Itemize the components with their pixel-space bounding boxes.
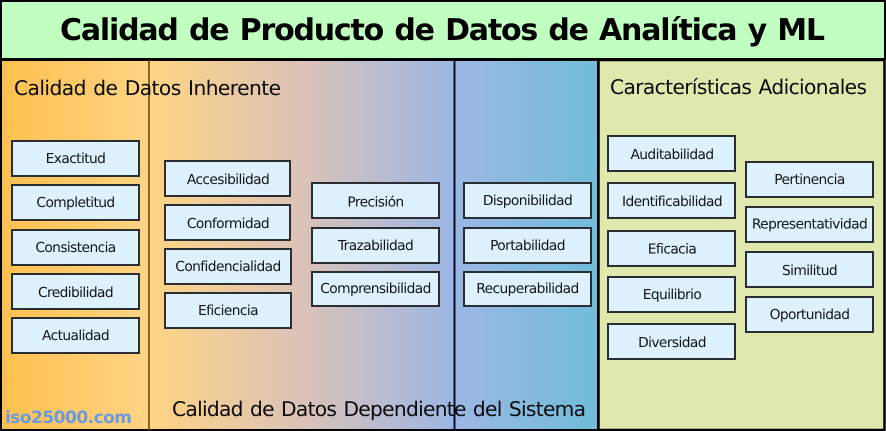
column 4: system dependent: [464, 183, 591, 306]
column 6: additional: Similitud: [782, 263, 837, 279]
column 3: inherent and system: Comprensibilidad: [320, 281, 431, 297]
heading: inherent: Calidad de Datos Inherente: [14, 76, 281, 100]
column 1: inherent: Exactitud: [46, 151, 105, 167]
column 5: additional: Auditabilidad: [630, 147, 714, 163]
column 2: inherent and system: Accesibilidad: [187, 172, 269, 188]
heading: additional: Características Adicionales: [610, 75, 867, 99]
column 5: additional: [608, 136, 735, 359]
column 6: additional: [746, 162, 873, 332]
column 1: inherent: Consistencia: [35, 240, 116, 256]
column 2: inherent and system: Conformidad: [187, 216, 269, 232]
column 2: inherent and system: Confidencialidad: [175, 259, 281, 275]
column 2: inherent and system: [165, 161, 291, 328]
column 1: inherent: Completitud: [36, 195, 115, 211]
watermark: iso25000.com: [5, 408, 132, 428]
column 1: inherent: Actualidad: [42, 328, 109, 344]
column 3: inherent and system: [312, 183, 439, 306]
panel: data quality gradient: [1, 60, 598, 430]
column 5: additional: Identificabilidad: [622, 194, 722, 210]
column 4: system dependent: Portabilidad: [490, 238, 565, 254]
column 6: additional: Oportunidad: [770, 307, 849, 323]
column 6: additional: Representatividad: [752, 216, 867, 232]
column 3: inherent and system: Precisión: [347, 194, 404, 210]
column 4: system dependent: Recuperabilidad: [476, 281, 579, 297]
column 5: additional: Equilibrio: [643, 287, 701, 303]
column 5: additional: Diversidad: [638, 335, 706, 351]
column 5: additional: Eficacia: [648, 242, 696, 258]
column 2: inherent and system: Eficiencia: [198, 303, 258, 319]
column 3: inherent and system: Trazabilidad: [337, 238, 413, 254]
column 6: additional: Pertinencia: [774, 172, 845, 188]
column 4: system dependent: Disponibilidad: [483, 193, 572, 209]
title: Calidad de Producto de Datos de Analítica y ML: [60, 13, 825, 48]
panel: additional characteristics: [598, 60, 884, 430]
column 1: inherent: [12, 141, 139, 353]
title banner: [1, 1, 885, 59]
heading: system dependent: Calidad de Datos Dependiente del Sistema: [172, 397, 586, 421]
column 1: inherent: Credibilidad: [38, 285, 113, 301]
